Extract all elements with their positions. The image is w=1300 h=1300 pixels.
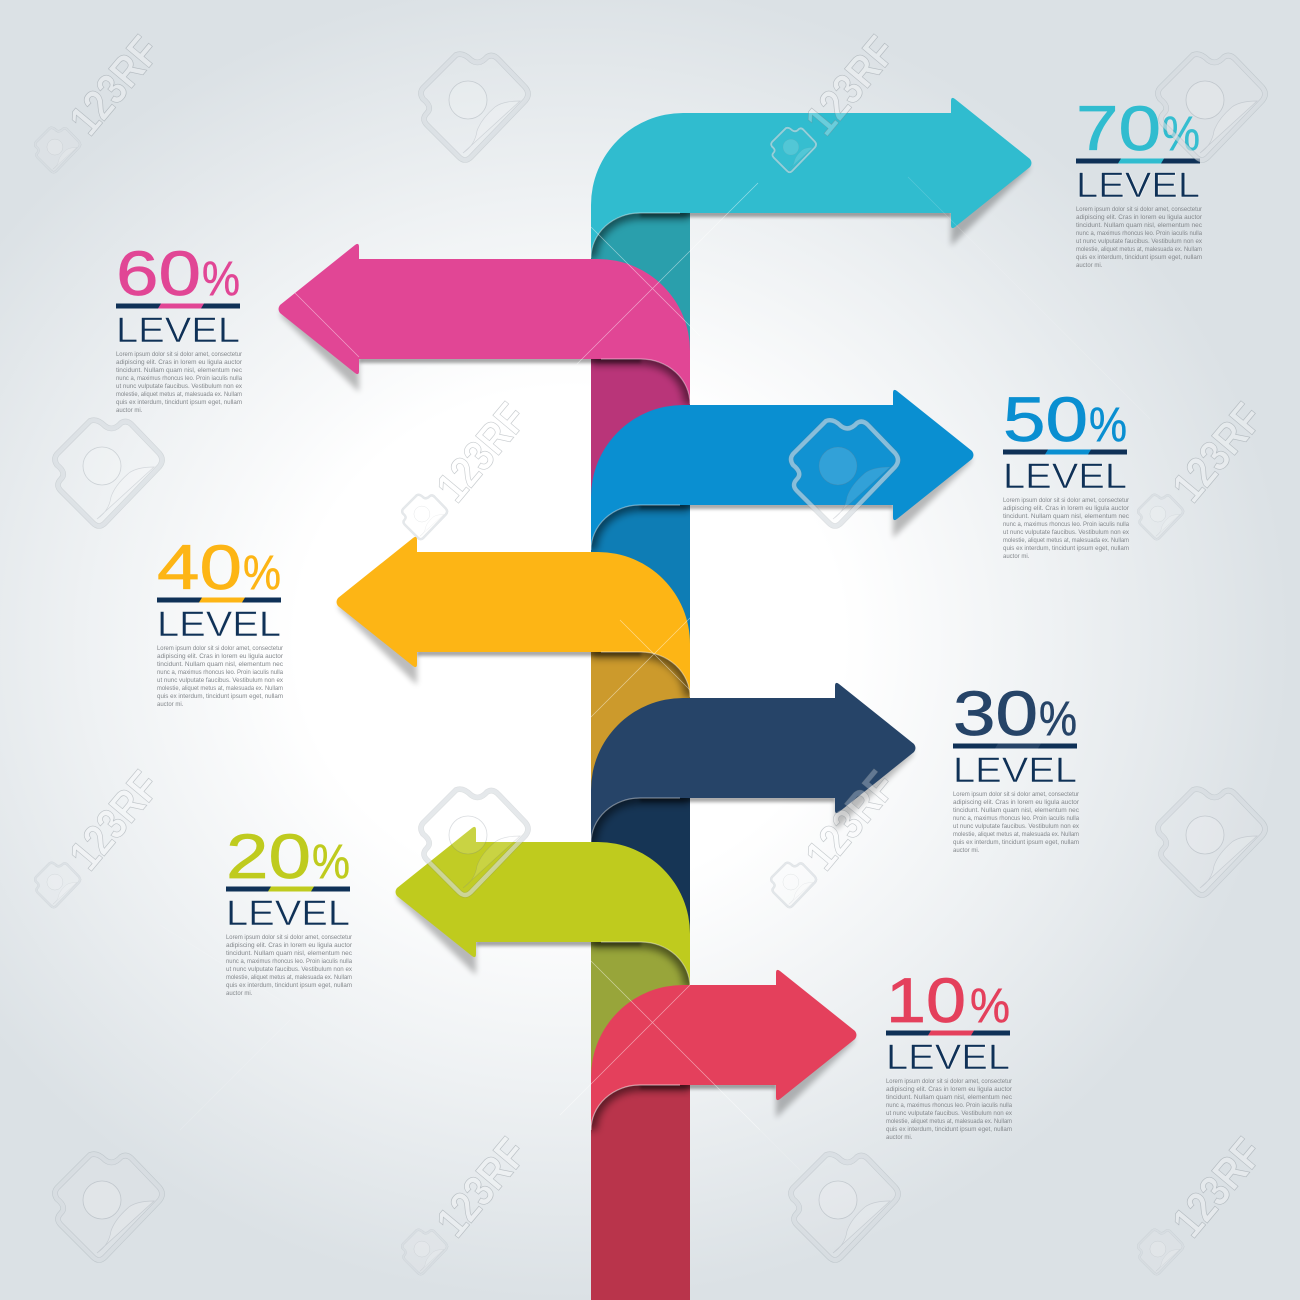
divider bar — [157, 598, 281, 602]
body text: nunc a, maximus rhoncus leo. Proin iaculis nulla — [157, 670, 284, 676]
body text: Lorem ipsum dolor sit si dolor amet, consectetur — [953, 792, 1079, 798]
word level: LEVEL — [157, 605, 281, 644]
body text: adipiscing elit. Cras in lorem eu ligula auctor — [226, 943, 352, 949]
label block 10% — [886, 966, 1013, 1141]
body text: auctor mi. — [1076, 263, 1103, 269]
body text: nunc a, maximus rhoncus leo. Proin iaculis nulla — [1076, 231, 1203, 237]
body text: tincidunt. Nullam quam nisl, elementum nec — [226, 951, 352, 957]
body text: Lorem ipsum dolor sit si dolor amet, consectetur — [1003, 498, 1129, 504]
body text: auctor mi. — [157, 702, 184, 708]
divider accent — [199, 598, 245, 602]
body text: auctor mi. — [1003, 554, 1030, 560]
body text: adipiscing elit. Cras in lorem eu ligula auctor — [157, 654, 283, 660]
body text: molestie, aliquet metus at, malesuada ex. Nullam — [157, 686, 283, 692]
percent sign: % — [202, 253, 240, 306]
body text: tincidunt. Nullam quam nisl, elementum nec — [116, 368, 242, 374]
body text: quis ex interdum, tincidunt ipsum eget, nullam — [116, 400, 242, 406]
watermark 123RF logos: 123RF — [60, 27, 170, 144]
body text: nunc a, maximus rhoncus leo. Proin iaculis nulla — [1003, 522, 1130, 528]
body text: ut nunc vulputate faucibus. Vestibulum non ex — [226, 967, 352, 973]
arrow level 30% — [591, 683, 916, 935]
value 10: 10 — [886, 966, 966, 1036]
percent sign: % — [1162, 108, 1200, 161]
body text: tincidunt. Nullam quam nisl, elementum nec — [886, 1095, 1012, 1101]
body text: Lorem ipsum dolor sit si dolor amet, consectetur — [1076, 207, 1202, 213]
body text: molestie, aliquet metus at, malesuada ex. Nullam — [116, 392, 242, 398]
word level: LEVEL — [116, 311, 240, 350]
body text: tincidunt. Nullam quam nisl, elementum nec — [157, 662, 283, 668]
percent sign: % — [1089, 399, 1127, 452]
divider bar — [116, 304, 240, 308]
word level: LEVEL — [1076, 166, 1200, 205]
percent sign: % — [243, 547, 281, 600]
watermark 123RF logos: 123RF — [60, 762, 170, 879]
body text: tincidunt. Nullam quam nisl, elementum nec — [1003, 514, 1129, 520]
stem 20% — [591, 934, 690, 1078]
divider accent — [268, 886, 314, 892]
percent sign: % — [1039, 693, 1077, 746]
watermark 123RF logos: 123RF — [1163, 394, 1273, 511]
divider bar — [953, 744, 1077, 748]
body text: nunc a, maximus rhoncus leo. Proin iaculis nulla — [116, 376, 243, 382]
body text: ut nunc vulputate faucibus. Vestibulum non ex — [157, 678, 283, 684]
body text: quis ex interdum, tincidunt ipsum eget, nullam — [953, 840, 1079, 846]
arrow level 40% — [336, 537, 690, 791]
body text — [1003, 498, 1130, 560]
watermark 123RF logos: 123RF — [1163, 1129, 1273, 1246]
body text: nunc a, maximus rhoncus leo. Proin iaculis nulla — [226, 959, 353, 965]
divider accent — [928, 1030, 974, 1036]
stem 30% — [591, 790, 690, 935]
body text: ut nunc vulputate faucibus. Vestibulum non ex — [886, 1111, 1012, 1117]
body text: Lorem ipsum dolor sit si dolor amet, consectetur — [157, 646, 283, 652]
stem 70% — [591, 205, 690, 352]
body text: molestie, aliquet metus at, malesuada ex. Nullam — [953, 832, 1079, 838]
divider bar — [886, 1030, 1010, 1036]
body text: tincidunt. Nullam quam nisl, elementum nec — [1076, 223, 1202, 229]
body text: adipiscing elit. Cras in lorem eu ligula auctor — [1076, 215, 1202, 221]
watermark 123RF logos: 123RF — [796, 27, 906, 144]
body text: adipiscing elit. Cras in lorem eu ligula auctor — [1003, 506, 1129, 512]
value 20: 20 — [226, 822, 311, 892]
word level: LEVEL — [226, 894, 350, 933]
divider bar — [1003, 450, 1127, 454]
word level: LEVEL — [953, 751, 1077, 790]
label block 60% — [116, 239, 243, 414]
label block 70% — [1076, 94, 1203, 269]
body text — [953, 792, 1080, 854]
label block 20% — [226, 822, 353, 997]
body text: Lorem ipsum dolor sit si dolor amet, consectetur — [116, 352, 242, 358]
body text: ut nunc vulputate faucibus. Vestibulum non ex — [1003, 530, 1129, 536]
arrow level 70% — [591, 98, 1032, 352]
body text: quis ex interdum, tincidunt ipsum eget, nullam — [226, 983, 352, 989]
body text: molestie, aliquet metus at, malesuada ex. Nullam — [1076, 247, 1202, 253]
arrow body 60% — [278, 244, 690, 404]
body text — [1076, 207, 1203, 269]
body text: nunc a, maximus rhoncus leo. Proin iaculis nulla — [953, 816, 1080, 822]
divider bar — [226, 886, 350, 892]
body text: tincidunt. Nullam quam nisl, elementum nec — [953, 808, 1079, 814]
divider accent — [1045, 450, 1091, 454]
arrow level 60% — [278, 244, 690, 498]
arrow level 50% — [591, 390, 974, 645]
value 40: 40 — [157, 533, 242, 603]
body text — [116, 352, 243, 414]
body text: Lorem ipsum dolor sit si dolor amet, consectetur — [886, 1079, 1012, 1085]
body text — [157, 646, 284, 708]
body text: adipiscing elit. Cras in lorem eu ligula auctor — [886, 1087, 1012, 1093]
arrow level 10% — [591, 970, 856, 1300]
divider bar — [1076, 158, 1200, 164]
body text: ut nunc vulputate faucibus. Vestibulum non ex — [116, 384, 242, 390]
body text: quis ex interdum, tincidunt ipsum eget, nullam — [1076, 255, 1202, 261]
arrow body 50% — [591, 390, 974, 550]
body text: adipiscing elit. Cras in lorem eu ligula auctor — [116, 360, 242, 366]
word level: LEVEL — [886, 1038, 1010, 1077]
stem 40% — [591, 644, 690, 791]
body text: molestie, aliquet metus at, malesuada ex. Nullam — [1003, 538, 1129, 544]
body text: Lorem ipsum dolor sit si dolor amet, consectetur — [226, 935, 352, 941]
body text: auctor mi. — [886, 1135, 913, 1141]
body text — [226, 935, 353, 997]
arrow body 10% — [591, 970, 856, 1130]
watermark 123RF logos: 123RF — [796, 762, 906, 879]
stem 10% — [591, 1077, 690, 1300]
body text: auctor mi. — [116, 408, 143, 414]
arrow body 40% — [336, 537, 690, 697]
arrow body 70% — [591, 98, 1032, 258]
arrow body 30% — [591, 683, 916, 843]
value 30: 30 — [953, 679, 1038, 749]
label block 50% — [1003, 385, 1130, 560]
watermark 123RF logos: 123RF — [427, 394, 537, 511]
body text: molestie, aliquet metus at, malesuada ex. Nullam — [226, 975, 352, 981]
label block 30% — [953, 679, 1080, 854]
arrow body 20% — [396, 827, 690, 987]
word level: LEVEL — [1003, 457, 1127, 496]
body text: adipiscing elit. Cras in lorem eu ligula auctor — [953, 800, 1079, 806]
body text: nunc a, maximus rhoncus leo. Proin iaculis nulla — [886, 1103, 1013, 1109]
label block 40% — [157, 533, 284, 708]
stem 60% — [591, 351, 690, 498]
body text: auctor mi. — [953, 848, 980, 854]
divider accent — [158, 304, 204, 308]
value 60: 60 — [116, 239, 201, 309]
body text: auctor mi. — [226, 991, 253, 997]
divider accent — [1118, 158, 1164, 164]
divider accent — [995, 744, 1041, 748]
body text: molestie, aliquet metus at, malesuada ex. Nullam — [886, 1119, 1012, 1125]
watermark 123RF logos: 123RF — [427, 1129, 537, 1246]
body text: quis ex interdum, tincidunt ipsum eget, nullam — [886, 1127, 1012, 1133]
body text: ut nunc vulputate faucibus. Vestibulum non ex — [1076, 239, 1202, 245]
stem 50% — [591, 497, 690, 645]
body text: quis ex interdum, tincidunt ipsum eget, nullam — [1003, 546, 1129, 552]
body text: quis ex interdum, tincidunt ipsum eget, nullam — [157, 694, 283, 700]
body text: ut nunc vulputate faucibus. Vestibulum non ex — [953, 824, 1079, 830]
arrow level 20% — [396, 827, 690, 1078]
percent sign: % — [970, 980, 1010, 1033]
value 50: 50 — [1003, 385, 1088, 455]
percent sign: % — [312, 836, 350, 889]
value 70: 70 — [1076, 94, 1161, 164]
body text — [886, 1079, 1013, 1141]
